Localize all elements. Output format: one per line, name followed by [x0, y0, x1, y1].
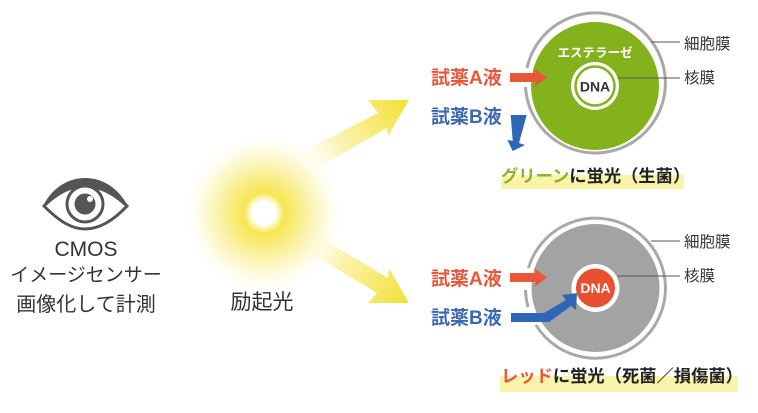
highlight: green caption — [501, 175, 684, 189]
highlight: red caption — [500, 376, 738, 392]
label: reagent A: 試薬A液 — [431, 67, 502, 89]
label: nuclear membrane: 核膜 — [684, 267, 715, 285]
icon: excitation light glow — [182, 131, 346, 295]
caption: red fluorescence: レッドに蛍光（死菌／損傷菌） — [501, 366, 743, 386]
icon: eye — [43, 178, 128, 229]
arrow: reagent A — [510, 68, 547, 87]
text: CMOS image sensor: CMOS — [54, 238, 118, 261]
label: reagent B: 試薬B液 — [431, 307, 502, 329]
leader lines — [618, 241, 680, 276]
caption: green fluorescence: グリーンに蛍光（生菌） — [501, 166, 690, 186]
label: excitation light: 励起光 — [230, 291, 294, 314]
text: CMOS image sensor: イメージセンサー — [10, 265, 162, 286]
arrow: reagent A — [510, 268, 547, 287]
cell membrane ring — [528, 218, 665, 358]
cytoplasm — [532, 224, 660, 352]
nucleus with DNA — [571, 62, 619, 110]
nucleus with DNA — [572, 264, 620, 312]
nucleus with DNA: DNA — [580, 280, 611, 296]
label: reagent B: 試薬B液 — [431, 106, 502, 128]
arrow: reagent B deflected — [507, 115, 527, 151]
arrow: reagent B entering nucleus — [511, 293, 577, 322]
leader lines — [618, 42, 680, 78]
esterase label: エステラーゼ — [557, 45, 633, 60]
label: cell membrane: 細胞膜 — [684, 35, 731, 53]
text: CMOS image sensor: 画像化して計測 — [16, 293, 156, 316]
cytoplasm — [531, 22, 659, 150]
panel: dead cell — [431, 218, 743, 392]
label: nuclear membrane: 核膜 — [684, 69, 715, 87]
label: cell membrane: 細胞膜 — [684, 233, 731, 251]
arrow: excitation light to bottom cell — [310, 237, 409, 303]
nucleus with DNA: DNA — [580, 78, 610, 94]
label: reagent A: 試薬A液 — [431, 268, 502, 290]
panel: live cell — [431, 13, 731, 189]
cell membrane ring — [526, 13, 665, 153]
text: CMOS image sensor — [10, 238, 162, 316]
arrow: excitation light to top cell — [300, 100, 409, 168]
